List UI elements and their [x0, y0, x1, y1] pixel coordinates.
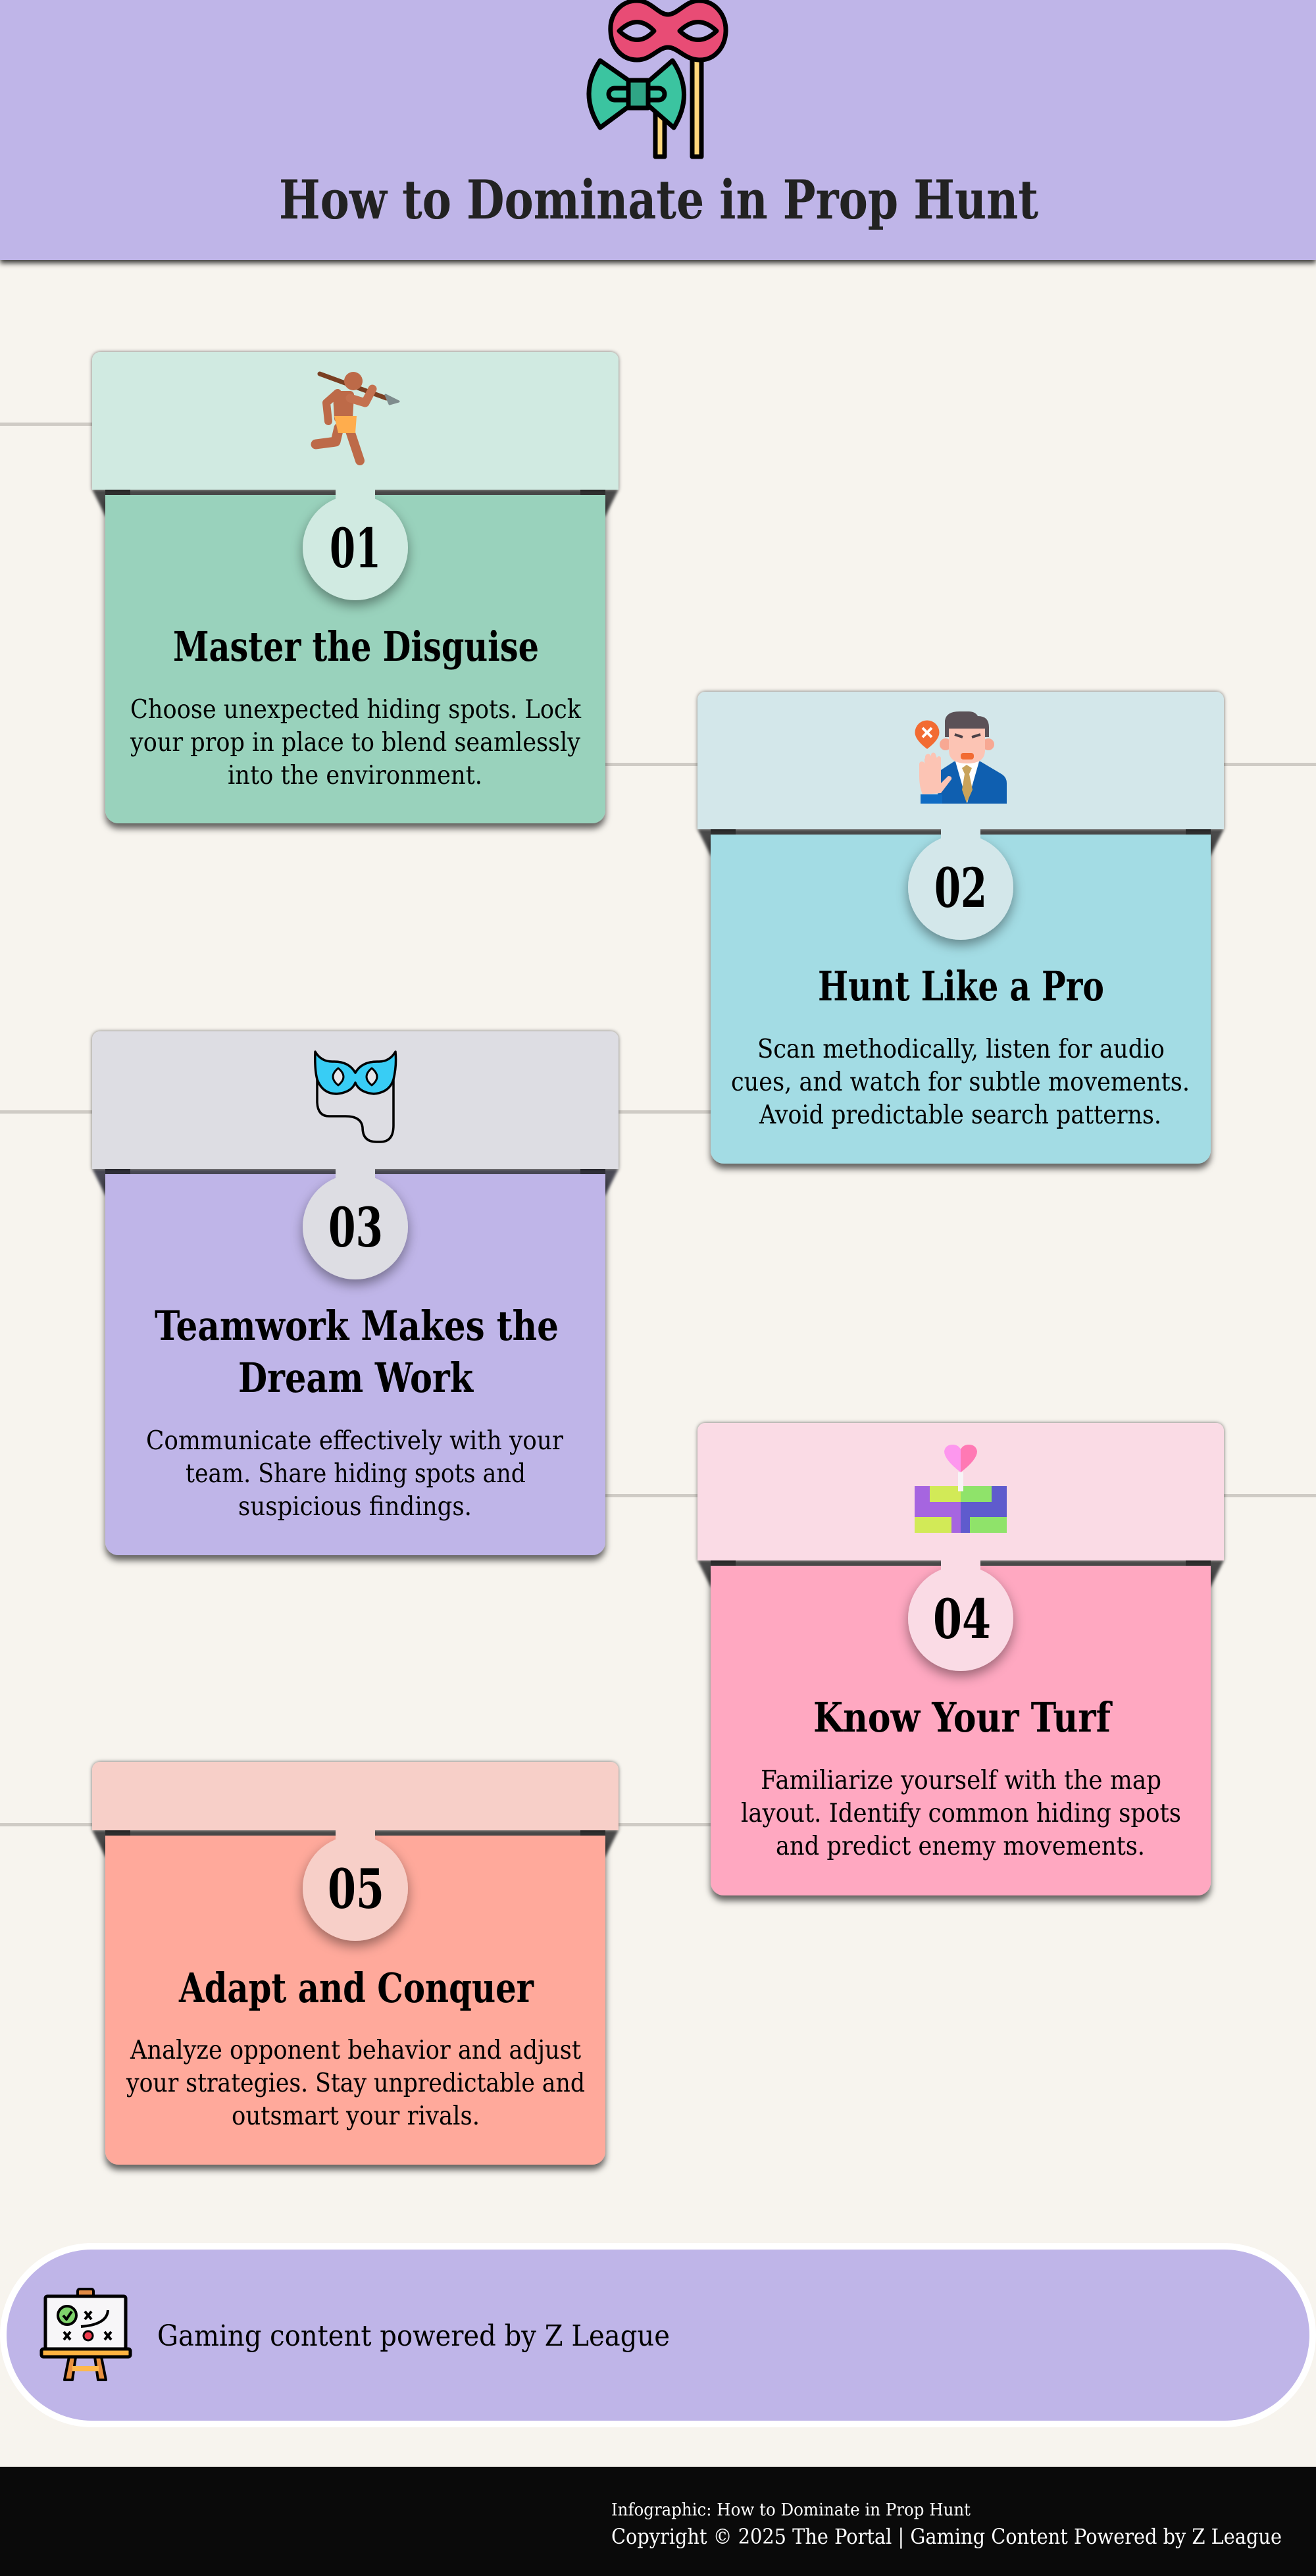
footer text: [611, 2500, 1282, 2549]
heading: Know Your Turf: [813, 1693, 1113, 1741]
body text: your strategies. Stay unpredictable and: [126, 2069, 585, 2098]
body text: Familiarize yourself with the map: [761, 1766, 1161, 1795]
heading: Dream Work: [238, 1354, 474, 1402]
body text: and predict enemy movements.: [776, 1832, 1145, 1861]
heading: Master the Disguise: [173, 623, 539, 671]
icon: businessman raising hand: [915, 711, 1007, 804]
number badge: 01: [330, 517, 381, 580]
body text: team. Share hiding spots and: [186, 1459, 526, 1489]
icon: strategy board on easel: [41, 2289, 130, 2380]
body text: [126, 2036, 585, 2131]
number badge: [303, 1166, 408, 1279]
heading: Adapt and Conquer: [178, 1964, 534, 2012]
number badge: [908, 1558, 1013, 1671]
body text: into the environment.: [228, 761, 482, 790]
icon: blue mask with cloth: [315, 1052, 396, 1142]
body text: [731, 1035, 1190, 1130]
icon: gift box with heart: [915, 1445, 1007, 1533]
number badge: [303, 487, 408, 600]
number badge: 02: [934, 857, 987, 920]
body text: outsmart your rivals.: [232, 2101, 480, 2131]
panel: step 03: [92, 1031, 619, 1555]
body text: [130, 695, 581, 790]
icon: mask and bow tie on sticks: [589, 1, 726, 157]
panel: step 05: [92, 1762, 619, 2165]
heading: [155, 1302, 559, 1402]
body text: Choose unexpected hiding spots. Lock: [130, 695, 581, 725]
footer text: Infographic: How to Dominate in Prop Hunt: [611, 2500, 971, 2520]
panel: step 01: [92, 352, 619, 823]
title: How to Dominate in Prop Hunt: [279, 169, 1038, 232]
body text: Analyze opponent behavior and adjust: [130, 2036, 581, 2065]
body text: Avoid predictable search patterns.: [759, 1100, 1161, 1130]
number badge: [908, 827, 1013, 940]
body text: [146, 1426, 563, 1522]
icon: spear runner: [316, 372, 399, 461]
number badge: 03: [328, 1197, 383, 1260]
body text: layout. Identify common hiding spots: [741, 1799, 1181, 1828]
body text: cues, and watch for subtle movements.: [731, 1068, 1190, 1097]
callout text: Gaming content powered by Z League: [157, 2319, 670, 2353]
body text: suspicious findings.: [238, 1492, 472, 1522]
header banner: [0, 0, 1316, 260]
connector lines: [0, 423, 1316, 1826]
heading: Teamwork Makes the: [155, 1302, 559, 1350]
body text: [741, 1766, 1181, 1861]
footer: [0, 2467, 1316, 2576]
panel: step 04: [697, 1423, 1224, 1895]
panel: step 02: [697, 692, 1224, 1164]
number badge: 04: [933, 1588, 991, 1651]
number badge: [303, 1828, 408, 1941]
body text: your prop in place to blend seamlessly: [130, 728, 580, 758]
heading: Hunt Like a Pro: [818, 962, 1104, 1010]
body text: Communicate effectively with your: [146, 1426, 563, 1456]
body text: Scan methodically, listen for audio: [757, 1035, 1165, 1064]
number badge: 05: [328, 1858, 384, 1921]
callout: gaming content banner: [3, 2246, 1313, 2424]
